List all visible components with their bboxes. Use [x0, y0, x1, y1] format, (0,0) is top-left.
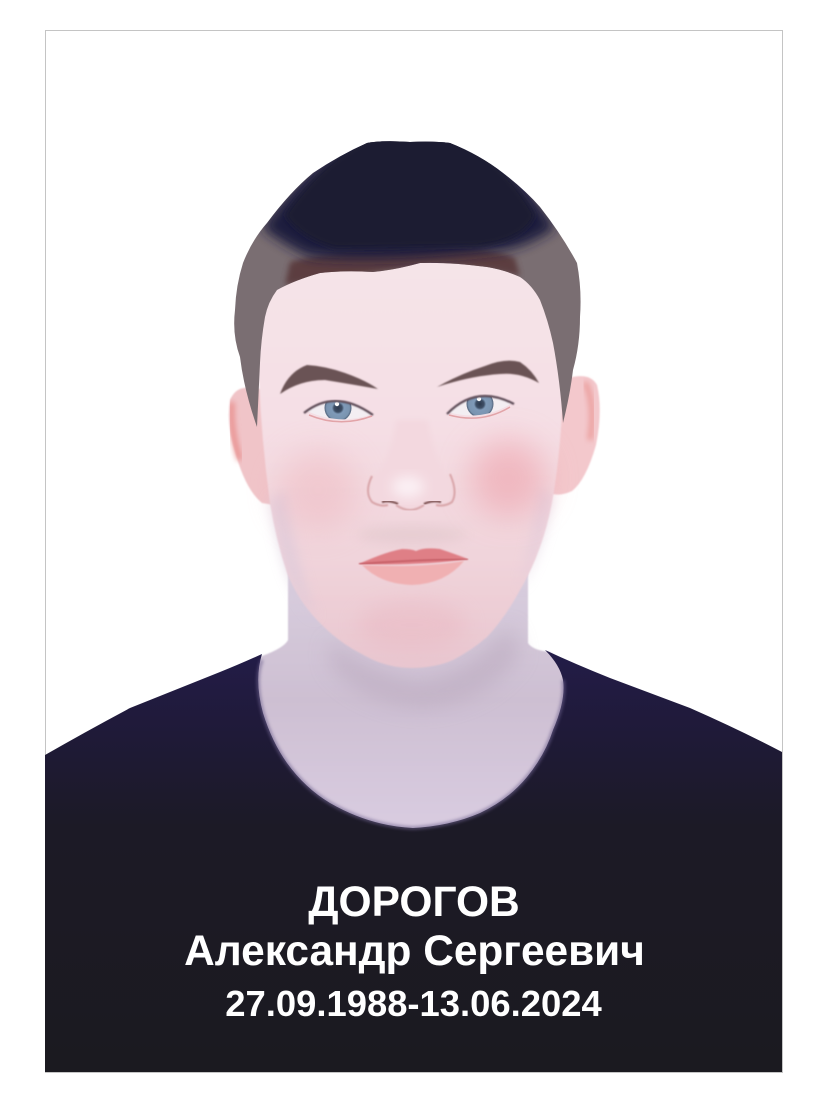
left eyebrow — [280, 365, 378, 394]
left cheek blush — [278, 450, 358, 530]
collar edge — [258, 660, 564, 828]
dark crown — [262, 130, 555, 259]
dark crown core — [285, 136, 535, 248]
under-chin shadow — [330, 625, 520, 708]
left eye — [302, 400, 374, 422]
given name and patronymic: Александр Сергеевич — [184, 927, 645, 974]
life dates: 27.09.1988-13.06.2024 — [225, 983, 602, 1024]
t-shirt — [45, 650, 782, 1072]
hair base — [234, 141, 581, 427]
face — [258, 250, 564, 668]
left ear inner — [232, 402, 240, 460]
nose — [368, 420, 455, 513]
name block — [184, 879, 645, 1024]
portrait photo — [45, 130, 782, 1072]
neck — [250, 560, 575, 840]
hair fringe tint — [285, 246, 520, 285]
surname: ДОРОГОВ — [308, 879, 520, 926]
jaw side shading left — [270, 490, 317, 620]
right cheek blush — [470, 440, 546, 516]
right ear inner — [585, 382, 592, 440]
left ear — [229, 388, 274, 505]
right eye — [447, 390, 514, 418]
mouth — [359, 548, 468, 585]
right ear — [550, 376, 600, 495]
stubble above lip — [357, 526, 467, 544]
hair — [234, 141, 581, 427]
chin blush — [357, 601, 467, 649]
jaw side shading right — [520, 485, 553, 590]
right eyebrow — [437, 361, 539, 387]
